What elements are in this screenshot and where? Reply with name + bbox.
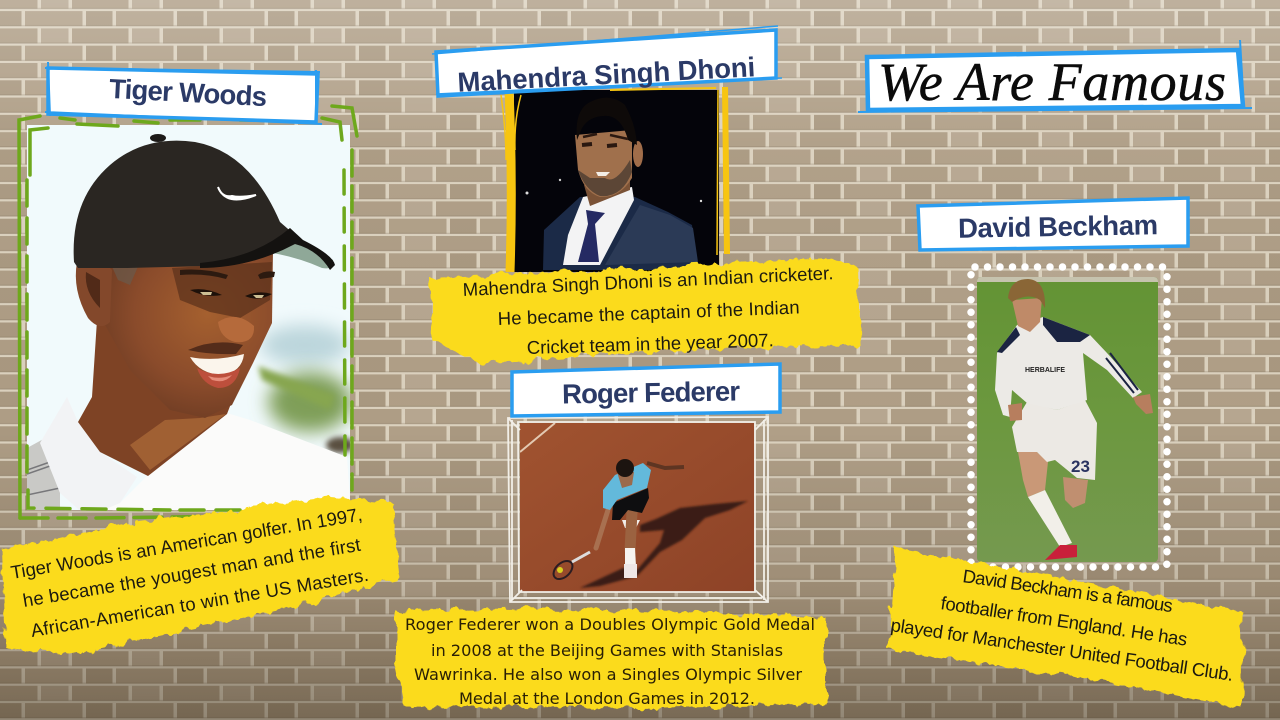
label: Dhoni	[432, 26, 782, 98]
shadow	[580, 501, 748, 588]
panel: Beckham	[971, 267, 1167, 567]
photo: Tiger Woods	[27, 125, 354, 517]
caption: Beckham	[888, 548, 1243, 708]
head	[633, 141, 643, 167]
caption: Dhoni	[430, 258, 860, 364]
ear	[76, 266, 112, 326]
caption: Beckham: David Beckham is a famous	[961, 565, 1174, 616]
caption: Tiger Woods: African-American to win the US Masters.	[29, 564, 370, 641]
photo: Beckham: HERBALIFE	[1025, 367, 1065, 374]
title: We Are Famous	[878, 52, 1226, 112]
brows and eyes	[180, 270, 228, 279]
neck	[584, 181, 630, 206]
label: Federer: Roger Federer	[562, 375, 741, 410]
photo: Dhoni	[514, 90, 719, 275]
caption: Dhoni: He became the captain of the Indian	[497, 296, 800, 329]
boot	[1045, 545, 1077, 560]
frame: white dotted border	[971, 267, 1167, 567]
racket	[552, 560, 574, 580]
caption: Federer: Medal at the London Games in 2012.	[459, 689, 755, 708]
frame: green dashes	[19, 106, 357, 518]
legs and arms	[596, 510, 608, 548]
caption: Dhoni: Cricket team in the year 2007.	[526, 329, 774, 358]
caption: Tiger Woods	[2, 497, 400, 654]
caption: Tiger Woods: Tiger Woods is an American golfer. In 1997,	[9, 503, 364, 583]
photo: Beckham	[977, 277, 1158, 562]
shirt	[603, 463, 651, 510]
face	[100, 250, 273, 418]
caption: Beckham: footballer from England. He has	[939, 592, 1189, 650]
panel: Tiger Woods	[19, 106, 357, 518]
panel: Dhoni	[501, 87, 727, 275]
frame: white sketch lines	[508, 417, 768, 602]
label: Beckham: David Beckham	[958, 209, 1158, 244]
cap	[74, 141, 303, 268]
shorts	[612, 488, 649, 520]
caption: Federer: Roger Federer won a Doubles Olympic Gold Medal	[405, 615, 815, 634]
label: Tiger Woods: Tiger Woods	[108, 73, 268, 112]
head	[1012, 298, 1042, 332]
label: Dhoni: Mahendra Singh Dhoni	[457, 51, 756, 98]
shirt	[563, 187, 634, 265]
photo: Federer	[520, 423, 754, 592]
caption: Tiger Woods: he became the yougest man and the first	[21, 534, 362, 611]
rear leg	[1063, 477, 1088, 508]
panel: Federer	[508, 417, 768, 602]
tie	[578, 210, 605, 262]
shirt	[995, 317, 1142, 417]
frame: yellow brush strokes	[501, 87, 727, 272]
caption: Federer: in 2008 at the Beijing Games with Stanislas	[431, 641, 783, 660]
head	[617, 472, 634, 488]
caption: Dhoni: Mahendra Singh Dhoni is an Indian cricketer.	[462, 262, 834, 300]
label: Beckham	[918, 198, 1188, 250]
shirt	[100, 413, 350, 510]
front leg	[1018, 452, 1048, 497]
photo: Beckham: 23	[1071, 457, 1090, 476]
hair	[577, 98, 637, 145]
caption: Beckham: played for Manchester United Football Club.	[889, 614, 1235, 685]
caption: Federer	[396, 608, 826, 708]
sock	[1028, 490, 1072, 547]
neck	[78, 325, 230, 476]
shorts	[1012, 400, 1097, 480]
caption: Federer: Wawrinka. He also won a Singles Olympic Silver	[414, 665, 802, 684]
suit	[543, 197, 697, 270]
moustache and smile	[188, 342, 243, 354]
label: Tiger Woods	[45, 62, 322, 124]
hands	[1008, 403, 1022, 421]
label: Federer	[512, 364, 780, 416]
